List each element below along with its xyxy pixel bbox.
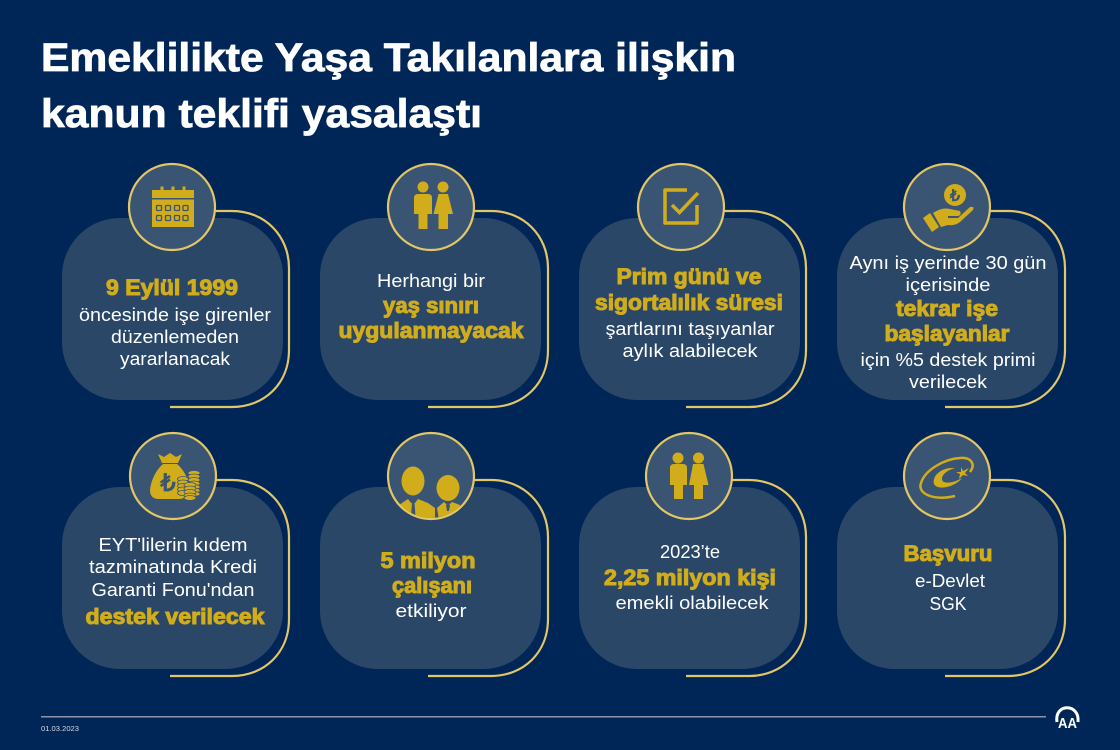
panel text: düzenlemeden bbox=[111, 327, 239, 347]
icon: man and woman busts bbox=[399, 466, 460, 520]
panel text bbox=[380, 548, 476, 621]
panel text: çalışanı bbox=[392, 573, 472, 598]
panel: 9 Eylül 1999 bbox=[62, 164, 289, 407]
panel text: öncesinde işe girenler bbox=[79, 305, 271, 325]
icon: two people bbox=[670, 452, 708, 499]
panel text: e-Devlet bbox=[915, 571, 985, 591]
panel text: EYT'lilerin kıdem bbox=[98, 535, 248, 555]
icon: hand with coin bbox=[923, 184, 974, 232]
icon: AA logo bbox=[1057, 708, 1078, 732]
icon: e-Devlet crescent and star bbox=[920, 458, 973, 498]
title: Emeklilikte Yaşa Takılanlara ilişkin bbox=[41, 36, 736, 80]
panel text: etkiliyor bbox=[396, 601, 467, 621]
panel text: verilecek bbox=[909, 372, 988, 392]
panel text: 2023’te bbox=[660, 542, 720, 562]
panel text bbox=[338, 271, 524, 343]
panel: başvuru bbox=[837, 433, 1065, 676]
panel text bbox=[604, 542, 776, 613]
panel: destek verilecek bbox=[62, 433, 289, 676]
panel text: Başvuru bbox=[904, 541, 992, 566]
panel text: SGK bbox=[930, 594, 966, 614]
panel text: Herhangi bir bbox=[377, 271, 485, 291]
title bbox=[41, 36, 736, 136]
panel text: tekrar işe bbox=[896, 296, 998, 321]
panel text bbox=[79, 275, 271, 369]
date: 01.03.2023 bbox=[41, 724, 79, 733]
icon: money bag and coins bbox=[150, 453, 200, 500]
panel text: aylık alabilecek bbox=[622, 341, 759, 361]
panel text: yararlanacak bbox=[120, 349, 231, 369]
panel text: Aynı iş yerinde 30 gün bbox=[850, 253, 1046, 273]
panel text: destek verilecek bbox=[86, 604, 265, 629]
icon: AA logo: AA bbox=[1058, 715, 1077, 732]
panel text: şartlarını taşıyanlar bbox=[606, 319, 775, 339]
panel text bbox=[850, 253, 1046, 392]
panel: prim günü bbox=[579, 164, 806, 407]
title: kanun teklifi yasalaştı bbox=[41, 92, 482, 136]
panel text bbox=[595, 264, 783, 361]
panel text bbox=[86, 535, 265, 629]
icon: calendar bbox=[152, 186, 194, 227]
icon: checkbox bbox=[665, 190, 698, 223]
icon: two people bbox=[414, 182, 453, 229]
panel text: uygulanmayacak bbox=[338, 318, 524, 343]
panel: yaş sınırı bbox=[320, 164, 548, 407]
panel text: başlayanlar bbox=[884, 321, 1010, 346]
icon: money bag and coins: ₺ bbox=[159, 470, 176, 497]
panel text: sigortalılık süresi bbox=[595, 290, 783, 315]
panel text: 5 milyon bbox=[380, 548, 476, 573]
panel text: Prim günü ve bbox=[616, 264, 762, 289]
panel: 5 milyon çalışanı bbox=[320, 433, 548, 676]
panel text: içerisinde bbox=[906, 275, 990, 295]
panel text: tazminatında Kredi bbox=[89, 557, 257, 577]
panel text: Garanti Fonu'ndan bbox=[92, 580, 254, 600]
panel: tekrar işe başlayanlar bbox=[837, 164, 1065, 407]
panel text: emekli olabilecek bbox=[616, 593, 770, 613]
icon: hand with coin: ₺ bbox=[949, 188, 961, 205]
panel text: için %5 destek primi bbox=[860, 350, 1036, 370]
panel: 2,25 milyon kişi bbox=[579, 433, 806, 676]
panel text: 2,25 milyon kişi bbox=[604, 565, 776, 590]
panel text: yaş sınırı bbox=[383, 293, 479, 318]
panel text: 9 Eylül 1999 bbox=[106, 275, 238, 300]
footer line bbox=[41, 716, 1046, 718]
panel text bbox=[904, 541, 992, 614]
